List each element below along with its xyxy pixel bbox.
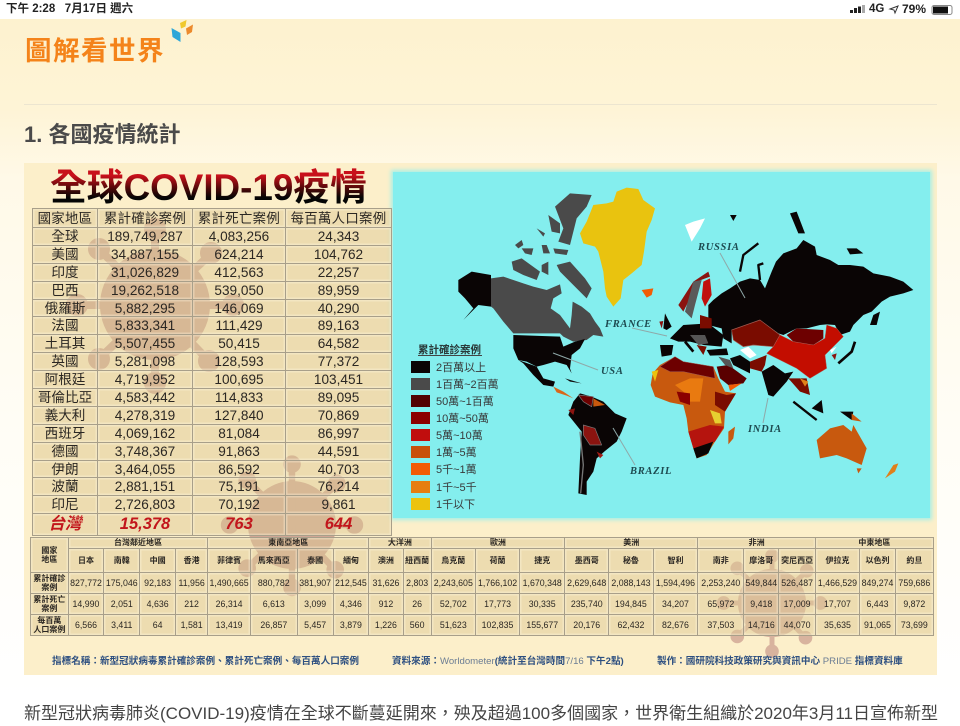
text: 827,772 [70,578,102,588]
world map: FRANCE [604,319,652,330]
text: 台灣鄰近地區 [114,538,162,547]
text: 5,281,098 [115,354,175,369]
text: 412,563 [214,265,264,280]
legend: 2百萬以上 [436,361,486,374]
legend: 1千~5千 [436,481,477,494]
text: 26,857 [260,620,287,630]
text: 4,636 [147,599,169,609]
text: 86,592 [218,462,260,477]
text: 50,415 [218,336,260,351]
text: 大洋洲 [388,538,412,547]
world map: USA [601,366,624,377]
text: 212 [184,599,199,609]
text: 212,545 [335,578,367,588]
divider [24,104,937,105]
footer: producer: 製作：國研院科技政策研究與資訊中心 PRIDE 指標資料庫 [657,656,903,667]
text: 人口案例 [33,625,65,634]
text: 17,707 [824,599,851,609]
text: 土耳其 [45,336,85,351]
text: 17,009 [784,599,811,609]
text: 30,335 [529,599,556,609]
text: 31,626 [372,578,399,588]
text: 4,083,256 [209,229,269,244]
text: 6,613 [263,599,285,609]
status bar: 79% [902,2,926,16]
text: 香港 [184,556,200,564]
text: 64,582 [318,336,359,351]
text: 549,844 [745,578,777,588]
text: 34,887,155 [111,247,179,262]
world map: RUSSIA [697,242,740,253]
text: 73,699 [901,620,928,630]
text: 17,773 [484,599,511,609]
text: 75,191 [218,479,260,494]
text: 4,346 [340,599,362,609]
text: 東南亞地區 [268,538,308,547]
text: 175,046 [106,578,138,588]
text: 印尼 [51,497,79,512]
text: 128,593 [214,354,264,369]
text: 51,623 [440,620,467,630]
world map: BRAZIL [629,466,672,477]
text: 103,451 [314,372,363,387]
text: 82,676 [662,620,689,630]
text: 34,207 [662,599,689,609]
status bar: 4G [869,3,884,15]
legend: 1萬~5萬 [436,446,477,459]
text: 26 [412,599,422,609]
text: 86,997 [318,426,359,441]
text: 89,095 [318,390,359,405]
text: 地區 [41,555,57,564]
text: 累計確診 [33,574,65,582]
section heading: 1. 各國疫情統計 [24,122,180,147]
text: 台灣 [48,515,82,533]
text: 烏克蘭 [441,556,465,564]
text: 俄羅斯 [45,300,85,316]
text: 235,740 [571,599,603,609]
text: 6,443 [866,599,888,609]
text: 每百萬人口案例 [291,210,386,226]
text: 100,695 [214,372,264,387]
text: 4,069,162 [115,426,175,441]
text: 91,065 [864,620,891,630]
text: 89,959 [318,283,359,298]
icon: logo [172,20,193,42]
text: 6,566 [75,620,97,630]
text: 國家地區 [38,210,92,226]
text: 146,069 [214,300,264,316]
text: 62,432 [617,620,644,630]
text: 3,099 [304,599,326,609]
text: 14,990 [73,599,99,609]
map background [393,172,930,518]
legend: 1百萬~2百萬 [436,378,499,391]
text: 哥倫比亞 [38,390,92,405]
text: 381,907 [299,578,331,588]
text: 智利 [667,556,683,564]
text: 624,214 [214,247,264,262]
text: 德國 [51,444,79,459]
text: 19,262,518 [111,283,179,298]
text: 880,782 [258,578,290,588]
text: 89,163 [318,318,359,333]
world map: INDIA [747,424,782,435]
text: 52,702 [440,599,467,609]
text: 馬來西亞 [258,556,290,564]
text: 約旦 [906,556,922,564]
text: 印度 [51,265,79,280]
text: 40,703 [318,462,359,477]
text: 77,372 [318,354,359,369]
text: 全球 [51,229,79,244]
text: 102,835 [482,620,513,630]
footer: data source: 資料來源：Worldometer(統計至台灣時間7/16 下午2點) [392,656,624,667]
text: 9,418 [750,599,772,609]
text: 759,686 [898,578,930,588]
text: 荷蘭 [490,556,506,564]
text: 763 [225,515,253,533]
text: 526,487 [781,578,813,588]
text: 70,192 [218,497,260,512]
text: 104,762 [314,247,363,262]
panel: covid infographic [24,163,937,675]
text: 11,956 [178,578,205,588]
text: 539,050 [214,283,264,298]
text: 1,226 [375,620,397,630]
text: 4,583,442 [115,390,175,405]
text: 日本 [78,556,94,564]
text: 捷克 [534,556,550,564]
text: 5,457 [304,620,326,630]
text: 1,594,496 [656,578,695,588]
text: 累計死亡案例 [198,210,280,226]
text: 中東地區 [858,538,890,547]
text: 2,088,143 [611,578,651,588]
legend: 50萬~1百萬 [436,395,494,408]
text: 91,863 [218,444,260,459]
text: 1,670,348 [523,578,562,588]
text: 5,833,341 [115,318,175,333]
text: 22,257 [318,265,359,280]
text: 13,419 [216,620,243,630]
text: 4,719,952 [115,372,175,387]
body paragraph: 新型冠狀病毒肺炎(COVID-19)疫情在全球不斷蔓延開來，殃及超過100多個國家，世界衛生組織於2020年3月11日宣佈新型 [24,704,938,723]
text: 31,026,829 [111,265,179,280]
text: 摩洛哥 [749,556,773,564]
text: 3,879 [340,620,362,630]
text: 26,314 [216,599,243,609]
text: 194,845 [615,599,647,609]
text: 2,726,803 [115,497,175,512]
text: 泰國 [307,556,323,564]
text: 阿根廷 [45,372,85,387]
text: 義大利 [45,408,85,423]
text: 伊拉克 [825,556,849,564]
text: 波蘭 [51,479,79,494]
text: 127,840 [214,408,264,423]
text: 189,749,287 [107,229,183,244]
text: 2,253,240 [701,578,740,588]
text: 92,183 [144,578,171,588]
text: 24,343 [318,229,359,244]
text: 中國 [150,556,166,564]
text: 44,591 [318,444,359,459]
text: 伊朗 [51,462,79,477]
text: 15,378 [120,515,170,533]
text: 9,872 [903,599,925,609]
text: 歐洲 [490,538,506,547]
text: 緬甸 [343,556,359,564]
text: 3,411 [111,620,132,630]
footer: indicator names: 指標名稱：新型冠狀病毒累計確診案例、累計死亡案例、每百萬人口案例 [52,656,359,667]
country statistics table [32,208,392,536]
site title: 圖解看世界 [25,36,165,66]
text: 2,881,151 [115,479,175,494]
text: 4,278,319 [115,408,175,423]
text: 912 [379,599,393,609]
legend: 5千~1萬 [436,463,477,476]
text: 法國 [51,318,79,333]
text: 案例 [41,583,57,592]
text: 澳洲 [378,556,394,564]
text: 14,716 [748,620,775,630]
text: 2,803 [406,578,428,588]
text: 南非 [713,556,729,564]
text: 1,581 [181,620,203,630]
text: 20,176 [573,620,600,630]
text: 111,429 [215,318,263,333]
text: 南韓 [114,556,130,564]
text: 西班牙 [45,426,85,441]
text: 1,466,529 [818,578,857,588]
text: 5,882,295 [115,300,175,316]
text: 37,503 [707,620,734,630]
text: 560 [410,620,424,630]
text: 76,214 [318,479,359,494]
text: 突尼西亞 [781,556,813,564]
text: 65,972 [707,599,734,609]
text: 菲律賓 [217,556,241,564]
text: 紐西蘭 [405,556,429,564]
text: 2,629,648 [567,578,606,588]
text: 非洲 [749,538,765,547]
legend: 10萬~50萬 [436,412,489,425]
text: 3,464,055 [115,462,175,477]
text: 44,070 [784,620,811,630]
text: 墨西哥 [575,556,599,564]
regional statistics table [30,537,934,636]
text: 114,833 [215,390,263,405]
text: 81,084 [218,426,260,441]
text: 3,748,367 [115,444,175,459]
text: 每百萬 [37,616,61,624]
text: 155,677 [526,620,558,630]
text: 849,274 [862,578,893,588]
text: 644 [325,515,352,533]
text: 70,869 [318,408,359,423]
text: 秘魯 [623,556,639,564]
status bar [0,0,960,19]
text: 1,490,665 [210,578,249,588]
text: 2,051 [111,599,133,609]
text: 2,243,605 [434,578,473,588]
text: 巴西 [51,283,79,298]
text: 累計死亡 [33,594,65,604]
legend: 5萬~10萬 [436,429,483,442]
infographic title: 全球COVID-19疫情 [50,167,367,208]
text: 35,635 [824,620,851,630]
text: 美國 [51,247,79,262]
text: 64 [153,620,163,630]
text: 40,290 [318,300,359,316]
text: 以色列 [865,556,889,564]
legend: 1千以下 [436,498,475,511]
text: 英國 [51,354,79,369]
text: 1,766,102 [478,578,517,588]
text: 累計確診案例 [104,210,186,226]
text: 5,507,455 [115,336,175,351]
text: 美洲 [623,538,639,547]
text: 9,861 [321,497,356,512]
legend: 累計確診案例 [418,343,481,356]
status bar: 下午 2:28 7月17日 週六 [6,3,133,15]
text: 案例 [41,604,57,613]
text: 國家 [41,546,57,554]
